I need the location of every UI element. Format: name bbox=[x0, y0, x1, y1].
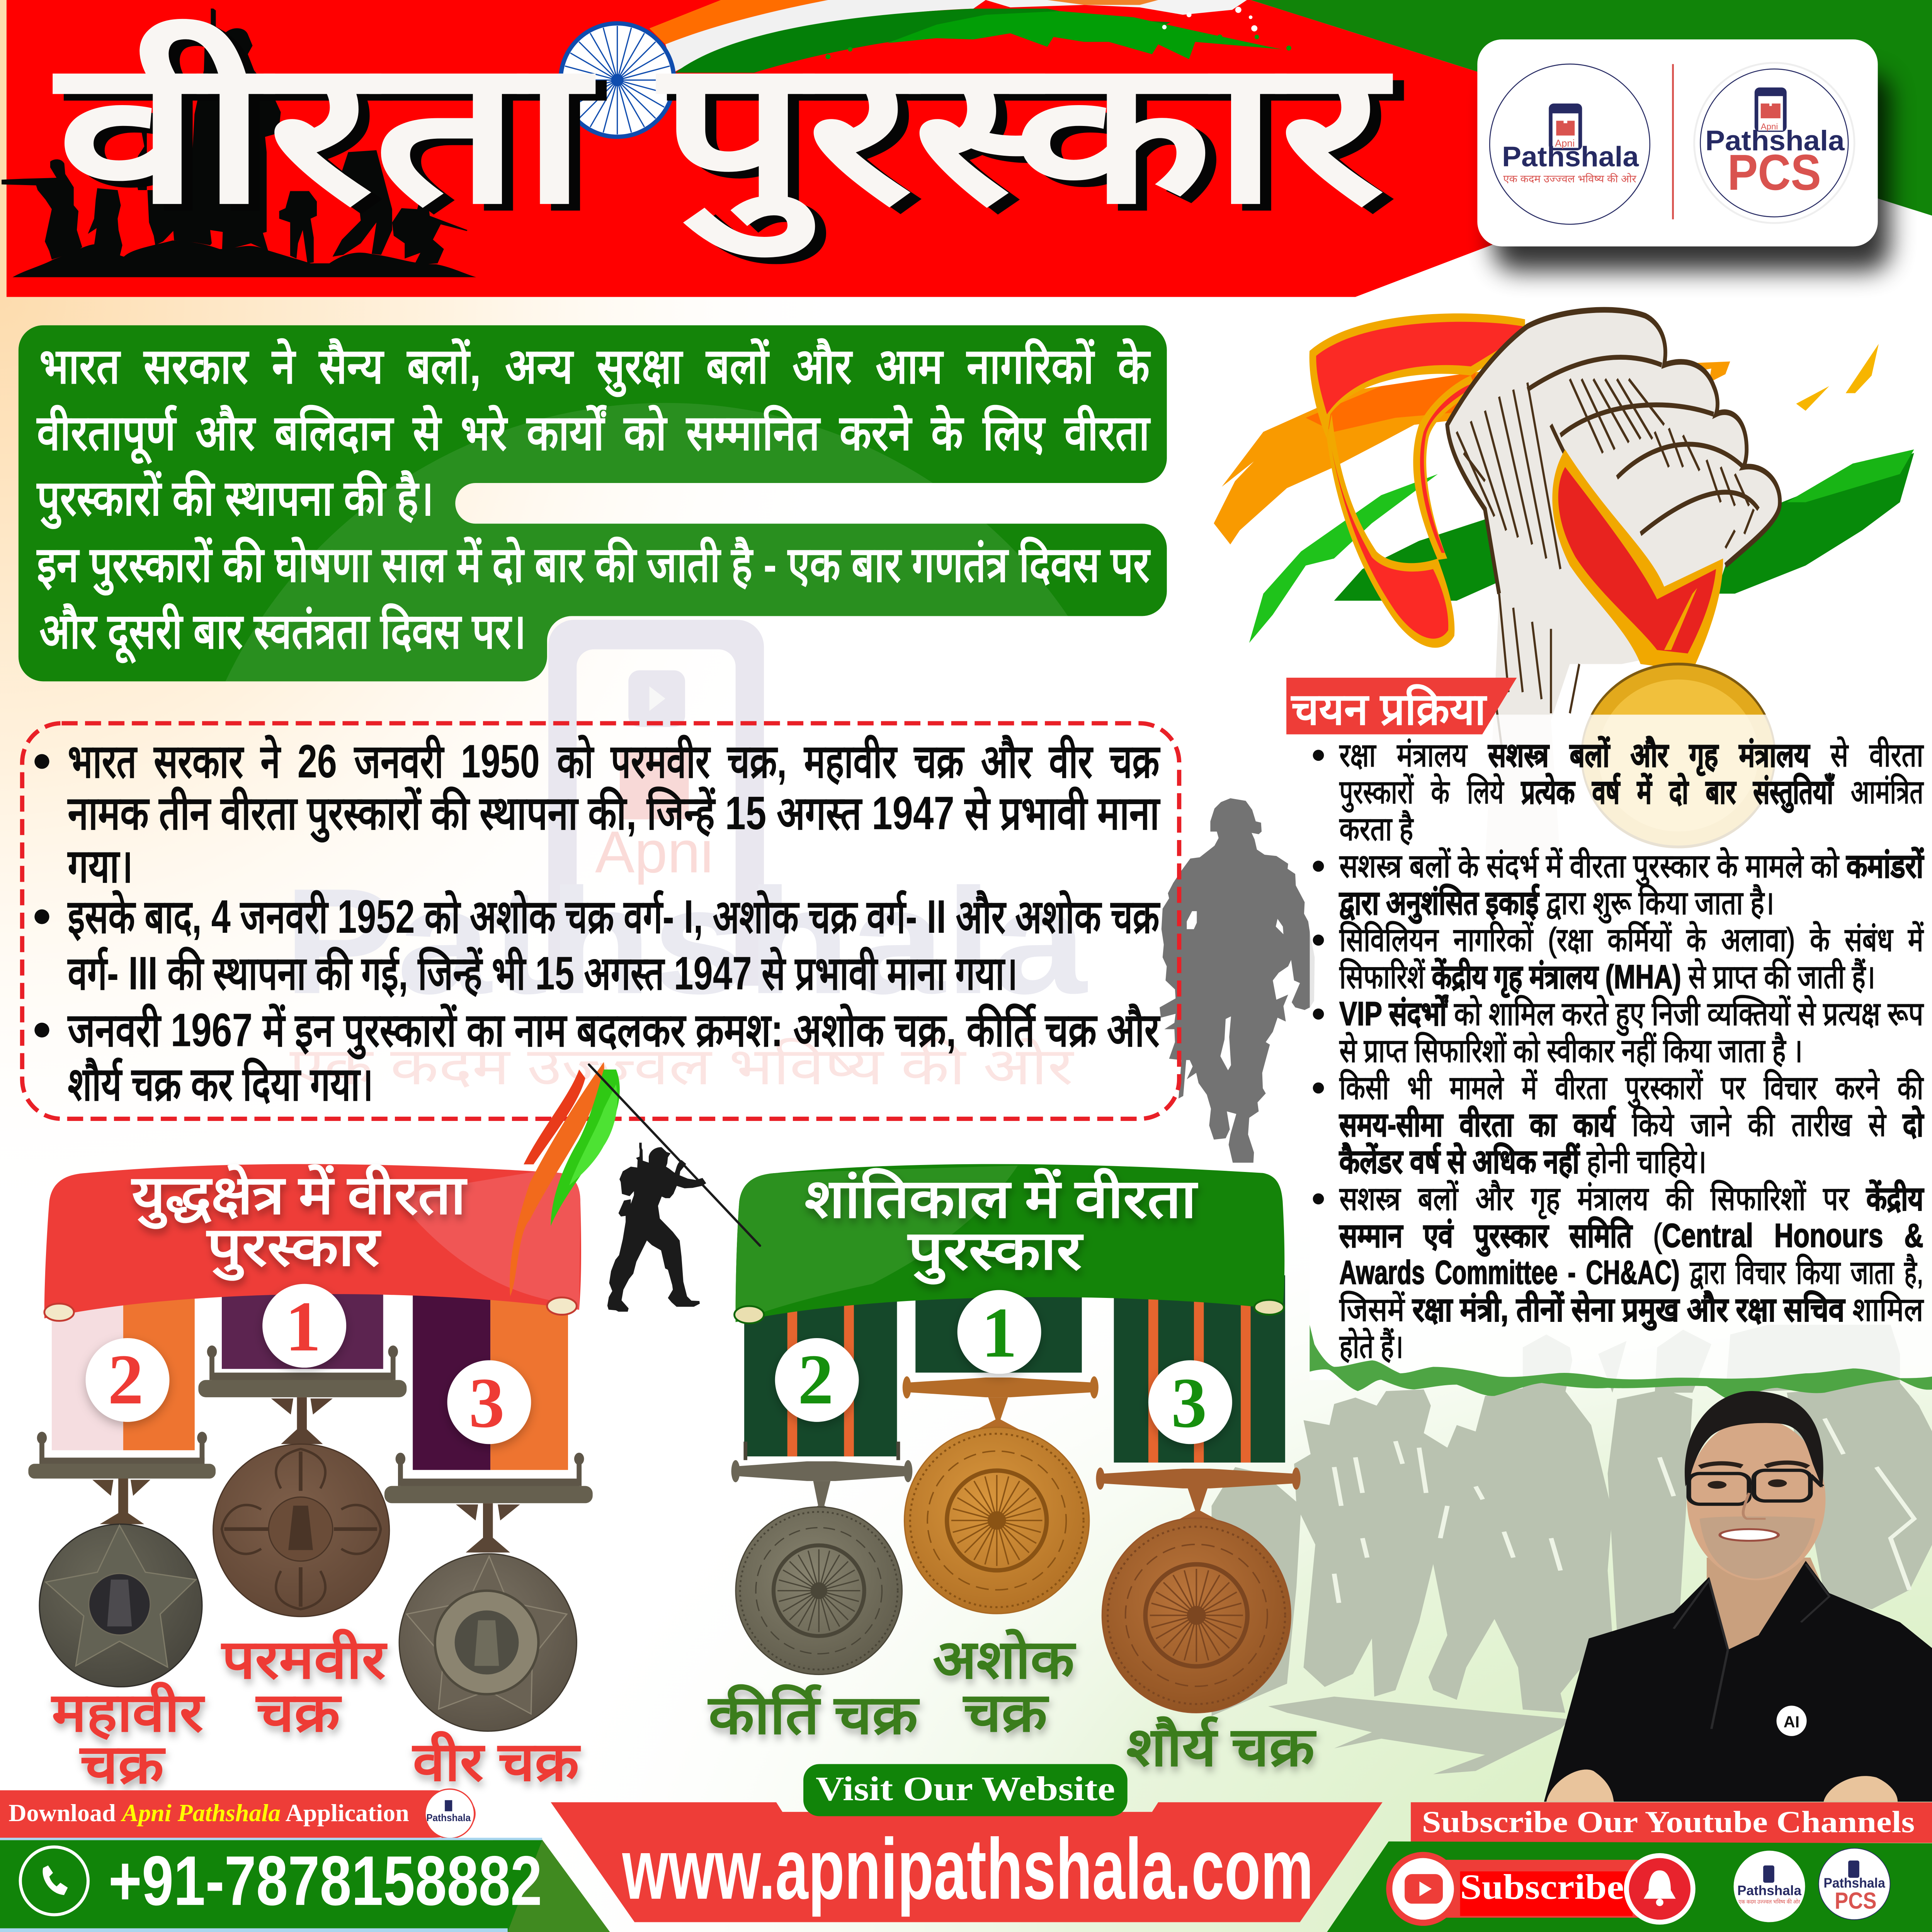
banner: peacetime gallantry bbox=[735, 1164, 1284, 1323]
subscribe button bbox=[1386, 1852, 1696, 1926]
selection text: करता है bbox=[1339, 810, 1414, 848]
website strip: www.apnipathshala.com bbox=[622, 1821, 1313, 1917]
labels: battlefield medals bbox=[51, 1629, 581, 1795]
scroll end left bbox=[44, 1304, 74, 1321]
bullets bbox=[1313, 750, 1324, 1204]
intro text: पुरस्कारों की स्थापना की है। bbox=[36, 470, 434, 529]
intro text: भारत सरकार ने सैन्य बलों, अन्य सुरक्षा बलों और आम नागरिकों के bbox=[39, 338, 1151, 398]
soldier silhouette bbox=[607, 1143, 706, 1312]
selection text: सिफारिशें केंद्रीय गृह मंत्रालय (MHA) से प्राप्त की जाती हैं। bbox=[1339, 957, 1875, 998]
title: वीरता पुरस्कार: वीरता पुरस्कार bbox=[53, 17, 1396, 260]
eyebrows bbox=[1700, 1463, 1808, 1467]
silhouette: grey soldier bbox=[1160, 798, 1315, 1163]
beard shade bbox=[1700, 1516, 1815, 1578]
badge: number 3 bbox=[447, 1360, 531, 1444]
medal group: battlefield bbox=[28, 1269, 1301, 1731]
website strip bbox=[551, 1764, 1383, 1922]
shirt badge text: AI bbox=[1784, 1713, 1799, 1731]
arm skin bbox=[1546, 1770, 1898, 1802]
brush: saffron bbox=[1214, 362, 1730, 544]
badge: number 3: 3 bbox=[1171, 1364, 1207, 1443]
watermark: Apni Pathshala: एक कदम उज्ज्वल भविष्य की ओर bbox=[289, 1038, 1074, 1095]
badge: number 1 bbox=[957, 1290, 1041, 1374]
badge: number 1: 1 bbox=[981, 1293, 1017, 1372]
logo: Apni Pathshala: एक कदम उज्ज्वल भविष्य की ओर bbox=[1503, 173, 1637, 185]
badges: peacetime bbox=[775, 1290, 1232, 1444]
translucent panel: selection process backdrop bbox=[1310, 714, 1932, 1380]
flag: tricolour brush bbox=[510, 1062, 620, 1296]
logo: Pathshala PCS: Pathshala bbox=[1705, 125, 1845, 156]
ribbon: Mahavir Chakra bbox=[52, 1275, 195, 1450]
ribbon: Param Vir Chakra bbox=[222, 1269, 383, 1369]
badge: number 1 bbox=[262, 1284, 346, 1368]
fist outline bbox=[1447, 310, 1780, 594]
shirt badge bbox=[1777, 1706, 1807, 1736]
watermark: Apni Pathshala: Apni bbox=[595, 819, 713, 885]
header banner bbox=[2, 0, 1932, 297]
banner title: शांतिकाल में वीरता bbox=[804, 1168, 1198, 1230]
logo: Apni Pathshala: Apni bbox=[1555, 138, 1575, 149]
history text: शौर्य चक्र कर दिया गया। bbox=[68, 1058, 373, 1111]
download strip bbox=[0, 1789, 476, 1838]
torn green edge bbox=[1310, 1325, 1932, 1401]
banner title: पुरस्कार bbox=[907, 1221, 1084, 1284]
intro text: और दूसरी बार स्वतंत्रता दिवस पर। bbox=[39, 603, 526, 664]
collar lines bbox=[1673, 1564, 1829, 1650]
logo card bbox=[1477, 39, 1878, 247]
history text bbox=[67, 735, 1161, 1111]
download strip: Download Apni Pathshala Application bbox=[9, 1799, 409, 1827]
scroll end right bbox=[547, 1298, 577, 1315]
green header corner bbox=[1251, 0, 1932, 216]
badge: number 1: 1 bbox=[285, 1287, 321, 1366]
medal: Shaurya Chakra bbox=[1096, 1468, 1301, 1713]
logo: app bbox=[425, 1789, 474, 1838]
selection text: द्वारा अनुशंसित इकाई द्वारा शुरू किया जाता है। bbox=[1339, 884, 1774, 924]
bullets bbox=[34, 754, 49, 1037]
banner title: पुरस्कार bbox=[206, 1218, 381, 1281]
flag pole bbox=[589, 1065, 760, 1246]
ribbon: Shaurya Chakra bbox=[1114, 1275, 1285, 1463]
icon: bell bbox=[1624, 1853, 1696, 1925]
labels: battlefield medals: परमवीर bbox=[221, 1629, 388, 1690]
icon: youtube play bbox=[1386, 1852, 1460, 1926]
watermark: Apni Pathshala bbox=[283, 620, 1088, 1095]
medal: Kirti Chakra bbox=[731, 1442, 912, 1675]
selection text: सशस्त्र बलों के संदर्भ में वीरता पुरस्कार के मामले को कमांडरों bbox=[1339, 847, 1924, 886]
medal bbox=[1582, 664, 1775, 847]
selection text bbox=[1339, 736, 1924, 1365]
logo: Apni Pathshala: Pathshala bbox=[1502, 141, 1639, 172]
subscribe button: Subscribe bbox=[1460, 1867, 1624, 1907]
labels: peacetime medals: शौर्य चक्र bbox=[1126, 1716, 1317, 1778]
selection text: होते हैं। bbox=[1339, 1328, 1403, 1365]
ribbon: Vir Chakra bbox=[413, 1275, 568, 1470]
eyes bbox=[1708, 1480, 1787, 1489]
medal: Vir Chakra bbox=[384, 1453, 593, 1731]
selection text: कैलेंडर वर्ष से अधिक नहीं होनी चाहिये। bbox=[1339, 1143, 1706, 1180]
silhouette: soldiers on hill bbox=[2, 9, 476, 277]
knuckle lines bbox=[1527, 357, 1759, 587]
labels: battlefield medals: वीर चक्र bbox=[412, 1731, 581, 1793]
selection text: से प्राप्त सिफारिशों को स्वीकार नहीं किया जाता है । bbox=[1339, 1032, 1803, 1070]
fist hatching bbox=[1457, 379, 1754, 762]
labels: peacetime medals bbox=[707, 1629, 1317, 1778]
intro text: इन पुरस्कारों की घोषणा साल में दो बार की जाती है - एक बार गणतंत्र दिवस पर bbox=[36, 536, 1151, 596]
history text: भारत सरकार ने 26 जनवरी 1950 को परमवीर चक्र, महावीर चक्र और वीर चक्र bbox=[68, 735, 1161, 787]
logo: Pathshala PCS small bbox=[1819, 1848, 1890, 1920]
polo shirt bbox=[1544, 1561, 1932, 1802]
medal: Mahavir Chakra bbox=[28, 1432, 216, 1687]
hair bbox=[1685, 1391, 1823, 1488]
badge: number 2 bbox=[775, 1338, 859, 1422]
phone strip: +91-7878158882 bbox=[109, 1841, 542, 1920]
selection text: जिसमें रक्षा मंत्री, तीनों सेना प्रमुख और रक्षा सचिव शामिल bbox=[1339, 1290, 1924, 1330]
badge: number 3: 3 bbox=[469, 1364, 505, 1443]
placket bbox=[1711, 1650, 1728, 1729]
intro text bbox=[36, 338, 1151, 664]
selection process panel bbox=[1286, 678, 1932, 1401]
medal: Ashok Chakra bbox=[903, 1376, 1099, 1614]
badge: number 3 bbox=[1148, 1360, 1232, 1444]
badge: number 2 bbox=[86, 1338, 169, 1422]
intro text: वीरतापूर्ण और बलिदान से भरे कार्यों को सम्मानित करने के लिए वीरता bbox=[36, 405, 1151, 464]
youtube strip: Subscribe Our Youtube Channels bbox=[1422, 1805, 1915, 1839]
logo card shadow bbox=[1493, 74, 1890, 271]
banner: battlefield gallantry bbox=[44, 1164, 581, 1321]
history text: वर्ग- III की स्थापना की गई, जिन्हें भी 15 अगस्त 1947 से प्रभावी माना गया। bbox=[67, 947, 1018, 1000]
badges: battlefield bbox=[86, 1284, 531, 1444]
tricolour swoosh bbox=[649, 0, 1291, 73]
history text: गया। bbox=[67, 840, 133, 892]
visit pill: Visit Our Website bbox=[816, 1770, 1115, 1808]
labels: battlefield medals: चक्र bbox=[79, 1735, 166, 1795]
photo: presenter bbox=[1544, 1391, 1932, 1802]
ribbon front bbox=[1552, 449, 1723, 671]
red header shape bbox=[7, 0, 1734, 297]
medal: Param Vir Chakra bbox=[198, 1345, 406, 1617]
watermark: Apni Pathshala: Pathshala bbox=[283, 857, 1088, 1025]
neck bbox=[1707, 1558, 1827, 1655]
banner title: युद्धक्षेत्र में वीरता bbox=[131, 1164, 468, 1229]
logo: Apni Pathshala small: एक कदम उज्ज्वल भविष्य की ओर bbox=[1738, 1899, 1801, 1905]
face bbox=[1687, 1418, 1825, 1580]
labels: battlefield medals: महावीर bbox=[51, 1682, 205, 1743]
labels: peacetime medals: कीर्ति चक्र bbox=[707, 1684, 920, 1746]
logo: Pathshala PCS: PCS bbox=[1728, 144, 1821, 201]
history text: नामक तीन वीरता पुरस्कारों की स्थापना की, जिन्हें 15 अगस्त 1947 से प्रभावी माना bbox=[67, 786, 1161, 843]
phone strip bbox=[0, 1838, 610, 1932]
ribbon: Kirti Chakra bbox=[744, 1281, 897, 1456]
youtube strip bbox=[1327, 1802, 1932, 1932]
logo: Pathshala PCS small: Pathshala bbox=[1823, 1876, 1885, 1891]
paint speckles bbox=[1162, 7, 1257, 31]
white gaps between soldiers bbox=[1334, 1418, 1914, 1603]
badge: number 2: 2 bbox=[108, 1340, 143, 1419]
illustration: fist with medal ribbon and tricolour brush bbox=[1214, 310, 1914, 861]
ribbon back band bbox=[1310, 313, 1525, 648]
history text: इसके बाद, 4 जनवरी 1952 को अशोक चक्र वर्ग- I, अशोक चक्र वर्ग- II और अशोक चक्र bbox=[67, 890, 1161, 943]
scroll end left bbox=[735, 1306, 764, 1323]
nose shade bbox=[1743, 1493, 1765, 1519]
logo: Pathshala PCS: Apni bbox=[1761, 122, 1778, 131]
logo: Pathshala PCS small: PCS bbox=[1835, 1887, 1877, 1913]
background soldiers bbox=[1212, 1325, 1932, 1774]
brush: saffron flecks bbox=[1796, 344, 1879, 411]
labels: peacetime medals: अशोक bbox=[933, 1629, 1077, 1690]
logo: Apni Pathshala bbox=[1490, 64, 1650, 224]
scroll end right bbox=[1254, 1300, 1284, 1315]
ribbon: Ashok Chakra bbox=[915, 1269, 1082, 1372]
smile bbox=[1720, 1529, 1778, 1541]
labels: peacetime medals: चक्र bbox=[962, 1683, 1049, 1743]
icon: ashoka chakra bbox=[561, 24, 674, 137]
logo: Apni Pathshala small bbox=[1734, 1851, 1805, 1922]
brush: green bbox=[1334, 516, 1504, 601]
illustration: flag bearer bbox=[510, 1062, 760, 1312]
labels: battlefield medals: चक्र bbox=[255, 1683, 342, 1743]
fist fill bbox=[1447, 310, 1780, 861]
history text: जनवरी 1967 में इन पुरस्कारों का नाम बदलकर क्रमश: अशोक चक्र, कीर्ति चक्र और bbox=[67, 1003, 1161, 1060]
icon: whatsapp phone bbox=[20, 1847, 88, 1915]
logo: Pathshala PCS bbox=[1694, 63, 1854, 223]
glasses bbox=[1689, 1470, 1822, 1504]
banner title bbox=[131, 1164, 468, 1281]
heading: चयन प्रक्रिया: चयन प्रक्रिया bbox=[1291, 684, 1488, 734]
badge: number 2: 2 bbox=[798, 1340, 833, 1419]
visit pill bbox=[803, 1764, 1128, 1816]
intro green panel bbox=[19, 325, 1167, 682]
banner title bbox=[804, 1168, 1198, 1284]
logo: Apni Pathshala small: Pathshala bbox=[1737, 1883, 1801, 1898]
logo: app: Pathshala bbox=[426, 1813, 471, 1823]
dashed history panel bbox=[22, 723, 1179, 1119]
title: वीरता पुरस्कार shadow: वीरता पुरस्कार bbox=[64, 24, 1407, 267]
